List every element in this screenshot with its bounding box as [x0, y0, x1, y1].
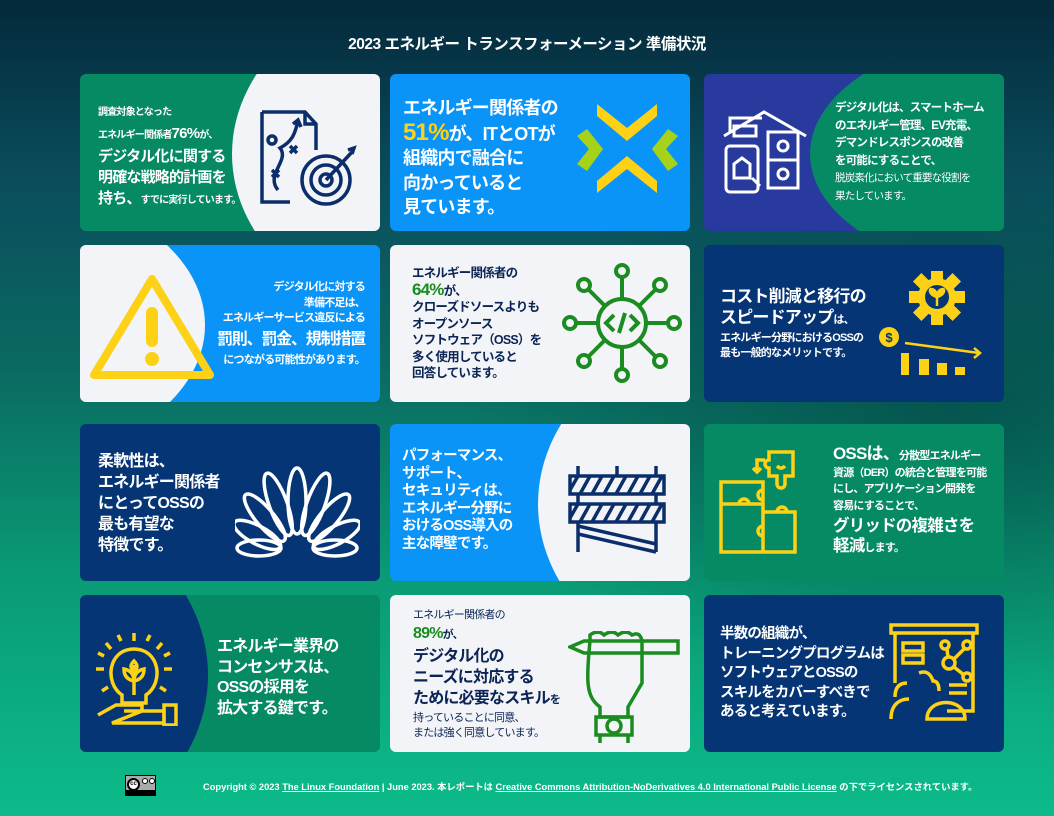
text: barriers: サポート、 — [402, 466, 470, 482]
icon: puzzle — [719, 450, 797, 554]
text: 64%: オープンソース — [412, 316, 493, 330]
text: grid complexity: にし、アプリケーション開発を — [833, 483, 976, 495]
text: 89%: ために必要なスキルを — [413, 690, 560, 707]
panel: consensus — [80, 595, 380, 752]
text: barriers — [402, 448, 512, 552]
panel: strategic plan 76% — [80, 74, 380, 231]
text: 51%: エネルギー関係者の — [403, 98, 558, 118]
text: training: 半数の組織が、 — [720, 626, 816, 642]
text: penalties: デジタル化に対する — [273, 281, 365, 293]
text: barriers: エネルギー分野に — [402, 500, 512, 516]
text: smart home: のエネルギー管理、EV充電、 — [835, 120, 977, 132]
icon: gear and falling bars: $ — [885, 330, 893, 345]
text: 64% — [412, 266, 541, 380]
panel: barriers — [390, 424, 690, 581]
text: 89%: エネルギー関係者の — [413, 609, 505, 621]
text: penalties: エネルギーサービス違反による — [223, 312, 365, 324]
text: flexibility: 特徴です。 — [98, 537, 172, 554]
text: 76%: 明確な戦略的計画を — [98, 169, 226, 186]
text: 89% — [413, 608, 560, 739]
text: flexibility: エネルギー関係者 — [98, 474, 220, 491]
text: cost reduction: コスト削減と移行の — [720, 287, 866, 306]
text: 76% — [98, 106, 241, 207]
text: cost reduction: 最も一般的なメリットです。 — [720, 347, 852, 359]
text: 89%: 持っていることに同意、 — [413, 712, 525, 724]
text: penalties: につながる可能性があります。 — [223, 354, 365, 366]
text: 76%: 調査対象となった — [98, 107, 171, 118]
text: consensus: OSSの採用を — [217, 679, 309, 696]
icon: spring flower — [235, 466, 360, 558]
text: barriers: パフォーマンス、 — [402, 448, 511, 464]
icon: hand holding pencil — [568, 631, 680, 743]
text: training: ソフトウェアとOSSの — [720, 665, 858, 681]
text: consensus: 拡大する鍵です。 — [217, 700, 337, 716]
panel: cost reduction — [704, 245, 1004, 402]
panel: smart home — [704, 74, 1004, 231]
icon: gear and falling bars — [879, 271, 982, 375]
panel: 64% open source — [390, 245, 690, 402]
text: grid complexity: 容易にすることで、 — [833, 500, 924, 512]
title: 2023 エネルギー トランスフォーメーション 準備状況 — [348, 36, 706, 53]
text: grid complexity — [833, 444, 987, 555]
text: 76%: デジタル化に関する — [98, 148, 226, 165]
text: barriers: 主な障壁です。 — [402, 536, 496, 552]
text: grid complexity: 資源（DER）の統合と管理を可能 — [833, 466, 986, 478]
text: cost reduction — [720, 287, 866, 359]
text: flexibility: にとってOSSの — [98, 495, 204, 512]
text: 76%: エネルギー関係者76%が、 — [98, 125, 217, 142]
text: copyright: Copyright © 2023 The Linux Foundation | June 2023. 本レポートは Creative Commons Attribution-NoDerivatives 4.0 International Public License の下でライセンスされています。 — [203, 782, 977, 792]
text: 51%: 組織内で融合に — [403, 148, 523, 168]
panel: training programs — [704, 595, 1004, 752]
icon: lightbulb in hand — [96, 633, 178, 726]
text: 76%: 持ち、すでに実行しています。 — [98, 190, 241, 207]
text: penalties: 罰則、罰金、規制措置 — [217, 330, 365, 348]
text: flexibility: 最も有望な — [98, 516, 174, 533]
text: barriers: おけるOSS導入の — [402, 518, 512, 534]
panel: flexibility — [80, 424, 380, 581]
text: grid complexity: OSSは、分散型エネルギー — [833, 444, 981, 463]
panel: penalties warning — [80, 245, 380, 402]
text: 51%: 見ています。 — [403, 197, 504, 217]
text: barriers: セキュリティは、 — [402, 483, 511, 499]
text: penalties: 準備不足は、 — [304, 296, 365, 308]
text: grid complexity: グリッドの複雑さを — [833, 517, 974, 535]
panel: OSS reduces grid complexity — [704, 424, 1004, 581]
text: 89%: 89%が、 — [413, 625, 463, 642]
text: 64%: 多く使用していると — [412, 350, 517, 364]
text: 64%: 回答しています。 — [412, 366, 504, 380]
text: 89%: または強く同意しています。 — [413, 727, 544, 739]
text: training: スキルをカバーすべきで — [720, 684, 870, 700]
text: smart home: 脱炭素化において重要な役割を — [835, 172, 970, 184]
text: 51%: 51%が、ITとOTが — [403, 118, 555, 146]
icon: presentation board — [889, 623, 979, 721]
icon: code network — [562, 263, 682, 383]
icon: road barrier — [568, 466, 666, 554]
text: consensus: コンセンサスは、 — [217, 658, 338, 676]
text: consensus — [217, 637, 339, 716]
text: 64%: クローズドソースよりも — [412, 300, 539, 314]
text: training: あると考えています。 — [720, 704, 855, 720]
text: cost reduction: エネルギー分野におけるOSSの — [720, 332, 863, 344]
text: smart home: デジタル化は、スマートホーム — [835, 102, 984, 114]
text: penalties — [217, 280, 366, 366]
text: smart home: デマンドレスポンスの改善 — [835, 137, 963, 149]
text: 51% — [403, 98, 558, 217]
text: consensus: エネルギー業界の — [217, 638, 339, 655]
text: smart home: を可能にすることで、 — [835, 154, 941, 166]
text: flexibility: 柔軟性は、 — [98, 453, 174, 470]
panel: 89% skills — [390, 595, 690, 752]
icon: smart house — [723, 110, 807, 194]
text: 51%: 向かっていると — [403, 172, 522, 192]
text: training: トレーニングプログラムは — [720, 646, 884, 662]
text: 89%: デジタル化の — [413, 648, 504, 665]
icon: cc badge — [125, 775, 156, 796]
icon: cc badge: cc — [130, 781, 137, 787]
panel: IT and OT 51% — [390, 74, 690, 231]
text: cost reduction: スピードアップは、 — [720, 308, 854, 327]
text: smart home — [835, 100, 984, 202]
text: 64%: エネルギー関係者の — [412, 266, 517, 280]
text: training — [720, 625, 884, 720]
text: grid complexity: 軽減します。 — [833, 537, 904, 555]
text: 89%: ニーズに対応する — [413, 669, 534, 686]
text: 64%: 64%が、 — [412, 280, 467, 298]
text: 64%: ソフトウェア（OSS）を — [412, 333, 541, 347]
text: flexibility — [98, 452, 220, 554]
text: smart home: 果たしています。 — [835, 190, 911, 202]
icon: strategy target — [260, 110, 357, 206]
icon: converging arrows — [577, 104, 678, 193]
footer: license — [125, 775, 977, 796]
icon: warning triangle — [90, 275, 214, 379]
